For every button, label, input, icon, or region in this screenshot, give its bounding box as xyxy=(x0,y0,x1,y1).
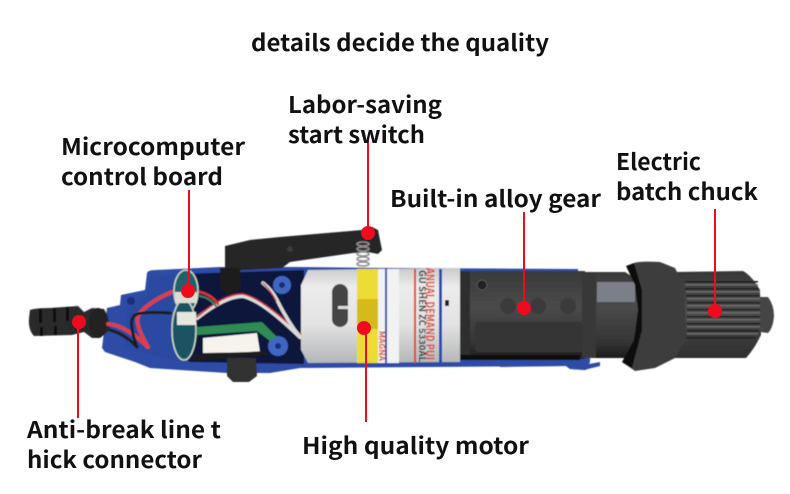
white switch block xyxy=(193,333,268,382)
label: microcomputer control board: control board xyxy=(61,158,223,192)
pointer: chuck xyxy=(708,209,722,318)
pointer: motor xyxy=(357,321,371,422)
alloy gear housing xyxy=(460,271,585,360)
chuck knob xyxy=(675,271,774,358)
label: electric batch chuck: Electric xyxy=(616,143,701,177)
power cable strain relief xyxy=(29,306,110,338)
label: labor-saving start switch: start switch xyxy=(288,116,425,150)
housing dark interior xyxy=(178,270,304,364)
control circuit boards xyxy=(172,270,277,360)
label: anti-break line thick connector xyxy=(26,411,221,475)
housing left cavity xyxy=(125,274,185,362)
motor label text: ANUAL DEMAND PUI xyxy=(422,267,438,360)
chuck collar xyxy=(622,262,686,371)
screw posts xyxy=(127,276,291,356)
blue housing xyxy=(102,267,590,373)
label: high quality motor: High quality motor xyxy=(302,427,530,461)
label: electric batch chuck: batch chuck xyxy=(616,173,758,207)
pointer: connector xyxy=(72,315,86,418)
label: microcomputer control board: Microcomputer xyxy=(61,128,246,162)
front tube xyxy=(582,272,638,358)
label: electric batch chuck xyxy=(616,143,758,207)
wires xyxy=(108,283,300,347)
product photo: electric screwdriver xyxy=(29,227,774,382)
motor xyxy=(301,267,460,363)
label: anti-break line thick connector: Anti-break line t xyxy=(26,411,221,445)
label: built-in alloy gear: Built-in alloy gear xyxy=(390,180,602,214)
pointer: alloy gear xyxy=(517,212,531,315)
motor: MAGNA xyxy=(376,331,387,362)
label: microcomputer control board xyxy=(61,128,246,192)
label: anti-break line thick connector: hick connector xyxy=(27,441,203,475)
motor: GU SHEN ZC 5330AL xyxy=(416,270,429,362)
label: labor-saving start switch xyxy=(288,86,442,150)
pointer: microcomputer control board xyxy=(181,190,195,298)
pointer: start switch xyxy=(361,140,375,240)
lower housing tab xyxy=(500,362,600,370)
title: details decide the quality xyxy=(251,24,549,58)
label: labor-saving start switch: Labor-saving xyxy=(288,86,442,120)
lever spring xyxy=(357,242,369,266)
start switch lever xyxy=(220,227,382,294)
